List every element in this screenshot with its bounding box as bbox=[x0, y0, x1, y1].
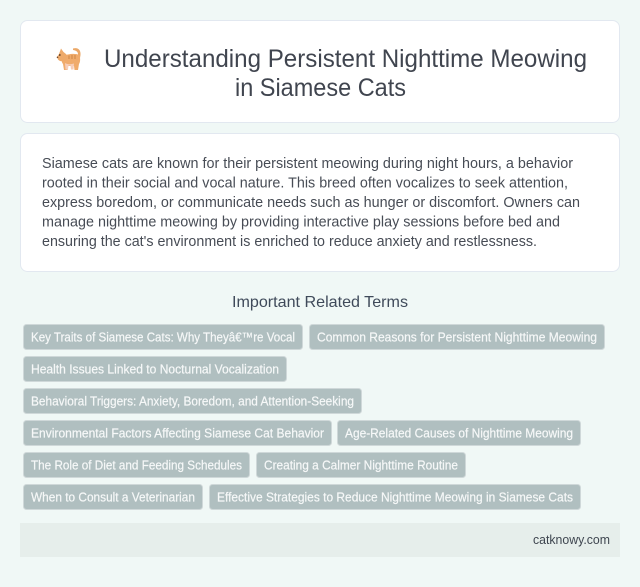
tag bbox=[338, 420, 580, 446]
description text: Siamese cats are known for their persistent meowing during night hours, a behavior bbox=[42, 155, 573, 172]
tag: Health Issues Linked to Nocturnal Vocalization bbox=[31, 362, 279, 376]
description text: express boredom, or communicate needs such as hunger or discomfort. Owners can bbox=[42, 194, 580, 211]
footer bbox=[20, 523, 620, 557]
title text: Understanding Persistent Nighttime Meowing bbox=[104, 45, 587, 73]
tag bbox=[24, 324, 302, 350]
tag: Key Traits of Siamese Cats: Why Theyâ€™re Vocal bbox=[31, 330, 295, 344]
tag: The Role of Diet and Feeding Schedules bbox=[31, 458, 242, 472]
tag bbox=[256, 452, 466, 478]
description text: ensuring the cat's environment is enriched to reduce anxiety and restlessness. bbox=[42, 233, 537, 250]
tag: Common Reasons for Persistent Nighttime Meowing bbox=[317, 330, 597, 344]
panel: description bbox=[20, 134, 620, 272]
tag: Effective Strategies to Reduce Nighttime Meowing in Siamese Cats bbox=[217, 490, 573, 504]
tag list bbox=[24, 324, 604, 510]
heading: important related terms: Important Related Terms bbox=[232, 294, 408, 311]
tag bbox=[24, 356, 286, 382]
tag: Age-Related Causes of Nighttime Meowing bbox=[345, 426, 573, 440]
tag: Environmental Factors Affecting Siamese Cat Behavior bbox=[31, 426, 325, 440]
panel: title card bbox=[20, 20, 620, 122]
title text: in Siamese Cats bbox=[235, 74, 406, 102]
icon: cat bbox=[57, 48, 81, 70]
tag: When to Consult a Veterinarian bbox=[31, 490, 195, 504]
tag bbox=[24, 420, 332, 446]
description text: rooted in their social and vocal nature. This breed often vocalizes to seek attention, bbox=[42, 174, 568, 192]
description text bbox=[42, 155, 580, 250]
title text bbox=[104, 45, 587, 102]
tag: Behavioral Triggers: Anxiety, Boredom, and Attention-Seeking bbox=[31, 394, 354, 408]
tag: Creating a Calmer Nighttime Routine bbox=[264, 458, 458, 472]
footer text: catknowy.com bbox=[533, 532, 610, 547]
tag bbox=[310, 324, 604, 350]
tag bbox=[24, 484, 202, 510]
tag bbox=[210, 484, 580, 510]
description text: manage nighttime meowing by providing interactive play sessions before bed and bbox=[42, 214, 560, 230]
tag bbox=[24, 452, 250, 478]
tag bbox=[24, 388, 362, 414]
